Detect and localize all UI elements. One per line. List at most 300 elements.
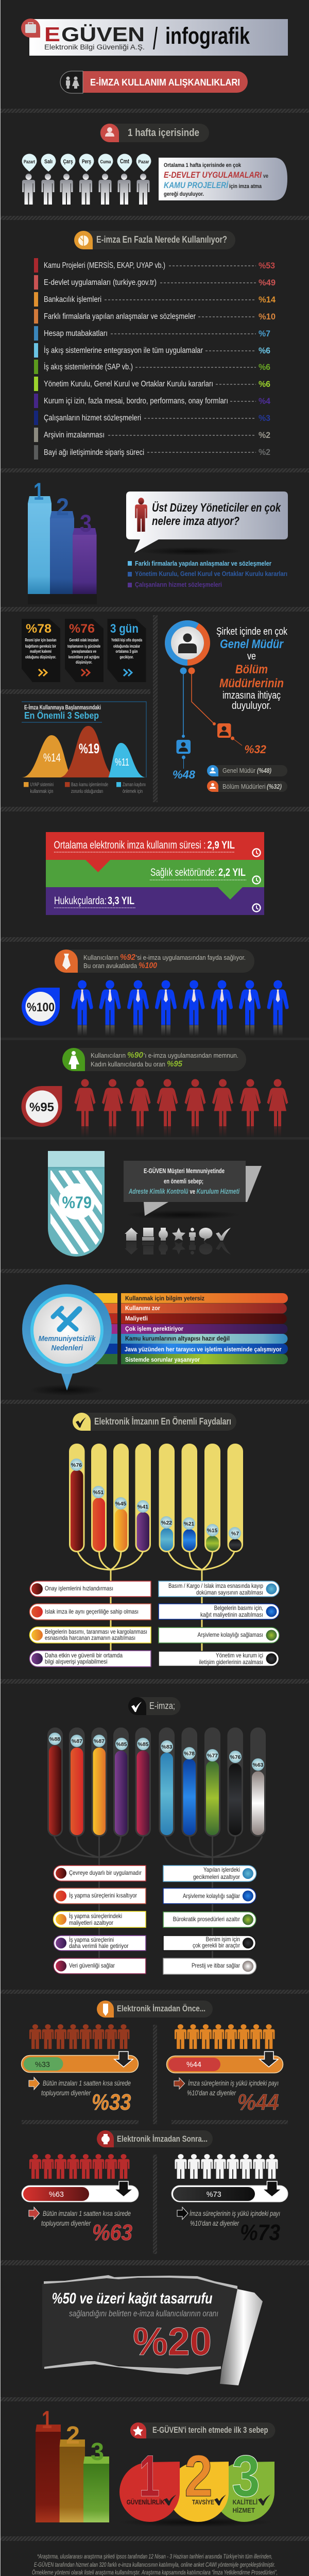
legend: top 3: Farklı firmalarla yapılan anlaşmalar ve sözleşmeler	[135, 560, 271, 567]
callout: müşteri memnuniyeti: Adreste Kimlik Kontrolü	[128, 1188, 188, 1195]
row: hesap mutabakatları	[34, 326, 270, 341]
bar 3	[73, 510, 97, 594]
bar 1: 1	[33, 478, 44, 505]
label: kayıp doküman: doküman sayısının azaltılması	[196, 1589, 263, 1596]
pill heading: elektronik imzadan sonra: Elektronik İmzadan Sonra...	[117, 2134, 208, 2144]
label: bürokrasi: Bürokratik prosedürleri azaltır	[173, 1916, 240, 1923]
pill heading: en önemli faydalar: Elektronik İmzanın En Önemli Faydaları	[94, 1416, 231, 1427]
label: süreç kısaltma: İş yapma süreçlerini kısaltıyor	[69, 1892, 137, 1899]
logo wordmark	[44, 24, 145, 51]
row: kurum içi	[34, 394, 271, 408]
benefit tube chart	[69, 1444, 243, 1651]
bar 2: 2	[56, 493, 69, 520]
badge: %100: %100	[27, 1001, 55, 1014]
bar 2	[50, 493, 74, 594]
top three badges	[118, 2444, 274, 2527]
blue connector	[173, 668, 196, 781]
label: güvenli ortam	[29, 1651, 151, 1667]
stat card: %78: olduğunu düşünüyor.	[25, 654, 56, 659]
progress bar: %44	[167, 2052, 283, 2073]
badge 1: güvenilirlik: 1	[139, 2444, 160, 2509]
progress bar: %44: %44	[186, 2060, 201, 2069]
3d bar chart: üst düzey yöneticiler	[28, 478, 97, 604]
badge: %95	[22, 1086, 62, 1127]
capsule: %79	[48, 1151, 105, 1257]
row: yönetim kurulu: %6	[259, 379, 270, 389]
label: kağıt maliyeti	[159, 1604, 279, 1619]
badge: %95: %95	[29, 1100, 54, 1114]
label: kağıt maliyeti: kağıt maliyetinin azaltılması	[200, 1611, 263, 1618]
duration panel	[46, 832, 264, 915]
chart: en önemli 3 sebep	[22, 702, 146, 794]
row: arşiv: %2	[259, 430, 270, 440]
caption: %44	[174, 2078, 279, 2115]
bar 1	[28, 478, 52, 594]
pill: %90 memnun: Kullanıcıların	[91, 1052, 126, 1059]
label: maliyet: İş yapma süreçlerindeki	[69, 1912, 122, 1920]
legend pill: genel müdür: (%48)	[257, 767, 271, 774]
tube %78: %78	[184, 1751, 195, 1757]
legend: sebepler	[24, 782, 146, 794]
badge 3: kaliteli hizmet: HİZMET	[233, 2506, 255, 2514]
legend pill: bölüm müdürleri	[207, 781, 287, 792]
men row	[72, 980, 289, 1036]
label: çevreye duyarlı	[54, 1866, 146, 1881]
caption: %33	[29, 2077, 131, 2115]
stat card: 3 gün	[107, 619, 146, 682]
callout: e-devlet and kamu projeleri: KAMU PROJELERİ	[164, 181, 229, 190]
badge 2: tavsiye: TAVSİYE	[192, 2498, 214, 2506]
pill: %92 fayda sağlıyor	[55, 950, 254, 973]
tube %41	[135, 1444, 151, 1552]
icon: crossed tools	[53, 1308, 79, 1329]
row: kurum içi: %4	[259, 396, 271, 406]
bar: java: Java yüzünden her tarayıcı ve işletim sisteminde çalışmıyor	[125, 1347, 282, 1353]
bar: kamu altyapısı: Kamu kurumlarının altyapısı hazır değil	[125, 1336, 230, 1342]
stat card: %78: Resmi işler için basılan	[25, 637, 57, 642]
row: kamu projeleri: %53	[259, 261, 275, 270]
legend pill: genel müdür	[207, 765, 287, 776]
callout: e-devlet and kamu projeleri: ve	[263, 173, 268, 179]
caption: %73: %10'dan az diyenler	[190, 2219, 239, 2227]
pill heading: elektronik imzadan önce	[97, 2001, 213, 2018]
row: sap: %6	[259, 362, 270, 372]
progress bar: %63	[22, 2181, 139, 2202]
people row: önce right	[175, 2024, 274, 2049]
row: iş akış entegrasyon: İş akış sistemlerine entegrasyon ile tüm uygulamalar	[44, 346, 203, 355]
callout: müşteri memnuniyeti: E-GÜVEN Müşteri Memnuniyetinde	[144, 1167, 225, 1175]
row: sap	[34, 360, 270, 374]
row: bayi ağı: %2	[259, 447, 270, 457]
row: yönetim kurulu: Yönetim Kurulu, Genel Kurul ve Ortaklar Kurulu kararları	[44, 380, 213, 388]
tube %77	[204, 1727, 220, 1837]
stat card: %76: %76	[69, 622, 95, 636]
legend pill: genel müdür: Genel Müdür	[222, 767, 255, 774]
label: çevreye duyarlı: Çevreye duyarlı bir uygulamadır	[69, 1869, 142, 1876]
stat card: %76	[65, 619, 104, 682]
label: gecikmeler: gecikmeleri azaltıyor	[193, 1873, 240, 1880]
row: bankacılık: Bankacılık işlemleri	[44, 295, 101, 304]
stat card: %78: maliyet kalemi	[30, 649, 52, 654]
icon row: services	[125, 1228, 231, 1255]
row: bankacılık	[34, 292, 276, 307]
label: onay işlemleri	[30, 1581, 151, 1597]
day pins: Salı	[44, 159, 53, 165]
pill heading: e-güven tercih sebepleri	[130, 2422, 275, 2438]
pill heading: 1 hafta içerisinde	[100, 124, 209, 142]
caption: %44: %10'dan az diyenler	[187, 2089, 236, 2097]
band: ortalama: Ortalama elektronik imza kullanım süresi :	[54, 839, 206, 851]
label: kayıp doküman	[159, 1581, 279, 1597]
label: ıslak imza	[29, 1604, 151, 1620]
progress bar: %33: %33	[35, 2060, 50, 2069]
pill: %92 fayda sağlıyor: Kullanıcıların	[83, 954, 118, 961]
legend: top 3	[128, 560, 287, 588]
callout: müşteri memnuniyeti: en önemli sebep;	[164, 1177, 203, 1185]
badge 2: tavsiye	[168, 2444, 229, 2522]
stat card: 3 gün: olduğunda imzalar	[113, 643, 140, 649]
callout: e-devlet and kamu projeleri: gereği duyuluyor.	[164, 191, 204, 197]
caption: %44: İmza süreçlerinin iş yükü içindeki payı	[188, 2079, 279, 2087]
caption: %33: Bütün imzaları 1 saatten kısa sürede	[43, 2079, 131, 2087]
bar: kamu altyapısı	[67, 1334, 287, 1344]
badge 3: kaliteli hizmet: 3	[232, 2444, 260, 2509]
badge: %100	[22, 988, 60, 1026]
bar: çok işlem: Çok işlem gerektiriyor	[125, 1326, 183, 1332]
map pin: memnuniyetsizlik nedenleri: Nedenleri	[52, 1344, 83, 1352]
tube %87: %87	[72, 1738, 82, 1744]
label: gerekli araç: çok gerekli bir araçtır	[193, 1942, 240, 1949]
pill heading: e-imza: E-imza;	[149, 1701, 175, 1711]
tube %41: %41	[138, 1504, 148, 1510]
label: arşivleme: Arşivleme kolaylığı sağlaması	[198, 1631, 263, 1638]
label: verimli: daha verimli hale getiriyor	[69, 1942, 129, 1950]
row: iş akış entegrasyon	[34, 343, 270, 358]
icon: woman	[68, 1051, 79, 1069]
tube %21	[181, 1444, 197, 1552]
people row: önce left	[29, 2024, 129, 2049]
row: kamu projeleri: Kamu Projeleri (MERSİS, EKAP, UYAP vb.)	[44, 261, 165, 270]
memnuniyetsizlik nedenleri bars	[67, 1293, 288, 1364]
legend: sebepler: UYAP sistemini	[30, 782, 54, 788]
podium 2	[60, 2422, 85, 2522]
label: gerekli araç	[163, 1936, 255, 1951]
stat card: %76: toplamanın iş gücünde	[67, 643, 100, 649]
usage list	[34, 258, 276, 460]
torn paper panel: kağıt tasarrufu: %50 ve üzeri kağıt tasarrufu	[52, 2290, 213, 2307]
day pins: Pazar	[138, 159, 149, 165]
row: hizmet sözleşmeleri: %3	[259, 413, 270, 423]
caption: %33: topluyorum diyenler	[41, 2089, 91, 2097]
label: bürokrasi	[163, 1912, 256, 1927]
row: sözleşmeler: %10	[259, 312, 276, 321]
e-imza labels right	[163, 1866, 256, 1974]
pill heading: 1 hafta içerisinde: 1 hafta içerisinde	[128, 127, 199, 139]
bar: maliyetli: Maliyetli	[125, 1316, 148, 1322]
tube %15	[204, 1444, 220, 1552]
label: belgelerin basımı	[29, 1627, 151, 1643]
badge 1: güvenilirlik	[119, 2444, 180, 2522]
logo wordmark: GÜVEN	[61, 24, 145, 46]
row: kurum içi: Kurum içi izin, fazla mesai, bordro, performans, onay formları	[44, 397, 228, 405]
callout: müşteri memnuniyeti: ve	[190, 1188, 195, 1195]
caption: %73	[177, 2207, 280, 2245]
callout: e-devlet and kamu projeleri: Ortalama 1 hafta içerisinde en çok	[164, 162, 242, 168]
tube %77: %77	[207, 1753, 218, 1759]
peak %14	[22, 735, 71, 777]
tube %45: %45	[115, 1501, 126, 1507]
bar: kullanımı zor: Kullanımı zor	[125, 1306, 160, 1312]
band: sağlık	[46, 860, 264, 887]
label: veri güvenliği: Veri güvenliği sağlar	[69, 1962, 115, 1969]
label: arşivleme	[159, 1628, 279, 1643]
tube %88: %88	[49, 1736, 60, 1742]
tube %76: %76	[71, 1462, 82, 1468]
connectors	[54, 1836, 262, 1959]
legend: sebepler: kullanmak için	[30, 789, 54, 794]
peak %11	[108, 743, 146, 777]
day pins: Cmt	[120, 158, 129, 165]
tube %51: %51	[93, 1489, 104, 1496]
speech bubble: üst düzey yöneticiler	[126, 492, 288, 555]
blue connector: %48	[173, 768, 196, 781]
caption: %33: %33	[92, 2090, 131, 2115]
ring chart text: ve	[247, 651, 256, 662]
tube %76	[228, 1727, 243, 1837]
ring chart text: Bölüm	[235, 663, 268, 676]
day pins: Pazart	[24, 159, 35, 164]
people row: sonra left	[29, 2154, 129, 2179]
e-imza labels left	[54, 1866, 146, 1974]
tube %45	[113, 1444, 129, 1552]
label: gerekli araç: Benim işim için	[206, 1936, 240, 1943]
stat card: %76: yavaşlamalara ve	[72, 649, 96, 654]
callout: müşteri memnuniyeti	[124, 1161, 262, 1219]
footnote	[21, 2553, 288, 2576]
row: hesap mutabakatları: Hesap mutabakatları	[44, 329, 108, 338]
row: bayi ağı	[34, 445, 270, 460]
pill heading: en önemli faydalar	[73, 1413, 236, 1431]
chart: en önemli 3 sebep: E-İmza Kullanmaya Başlanmasındaki	[24, 704, 101, 711]
tube %85 second	[135, 1727, 151, 1837]
legend: top 3: Çalışanların hizmet sözleşmeleri	[135, 581, 222, 588]
torn edge top	[44, 2275, 237, 2289]
pill: %90 memnun: Kadın kullanıcılarda bu oran	[91, 1061, 165, 1068]
people row: sonra right	[175, 2154, 278, 2179]
3d podium chart	[36, 2406, 109, 2522]
pill: %90 memnun	[62, 1048, 246, 1071]
tube %21: %21	[184, 1521, 194, 1527]
bar: sistem sorunları	[67, 1354, 288, 1364]
stat card: %78: kağıtların gereksiz bir	[25, 643, 56, 649]
tube %22	[159, 1444, 175, 1552]
tube %63: %63	[252, 1762, 264, 1768]
torn paper panel: kağıt tasarrufu	[42, 2275, 263, 2385]
day pins: Cuma	[100, 159, 111, 165]
speech bubble: üst düzey yöneticiler: nelere imza atıyor?	[152, 514, 239, 528]
pill: %92 fayda sağlıyor: Bu oran avukatlarda	[83, 962, 137, 970]
banner title: infografik	[165, 23, 250, 49]
row: e-devlet	[34, 275, 276, 290]
chart: en önemli 3 sebep: En Önemli 3 Sebep	[24, 710, 99, 721]
caption: %73: İmza süreçlerinin iş yükü içindeki payı	[190, 2209, 280, 2217]
ring chart text: Genel Müdür	[220, 637, 284, 651]
pill heading: elektronik imzadan sonra	[97, 2130, 213, 2147]
podium 3	[83, 2438, 109, 2522]
pill heading: e-güven tercih sebepleri: E-GÜVEN'i tercih etmede ilk 3 sebep	[152, 2425, 268, 2435]
band: ortalama: 2,9 YIL	[207, 839, 235, 851]
pill heading: elektronik imzadan önce: Elektronik İmzadan Önce...	[117, 2004, 205, 2013]
row: sözleşmeler: Farklı firmalarla yapılan anlaşmalar ve sözleşmeler	[44, 312, 196, 321]
label: belgelerin basımı: Belgelerin basımı, taranması ve kargolanması	[45, 1628, 147, 1635]
row: sözleşmeler	[34, 309, 276, 324]
label: prestij	[163, 1958, 256, 1974]
row: iş akış entegrasyon: %6	[259, 346, 270, 355]
label: verimli: İş yapma süreçlerini	[69, 1936, 114, 1943]
tube %7	[228, 1444, 243, 1552]
podium 1: 1	[42, 2406, 52, 2434]
label: iletişim giderleri: Yönetim ve kurum içi	[216, 1652, 263, 1659]
stat card: %78: %78	[26, 622, 52, 636]
stat card: %76: düşünüyor.	[76, 659, 92, 665]
label: onay işlemleri: Onay işlemlerini hızlandırması	[45, 1585, 113, 1592]
legend pill: bölüm müdürleri: (%32)	[267, 783, 282, 790]
caption: %63: Bütün imzaları 1 saatten kısa sürede	[43, 2209, 131, 2217]
bar 3: 3	[80, 510, 92, 537]
row: sap: İş akış sistemlerinde (SAP vb.)	[44, 362, 133, 371]
callout: e-devlet and kamu projeleri: için imza atma	[229, 183, 262, 190]
speech bubble: üst düzey yöneticiler: Üst Düzey Yöneticiler en çok	[152, 501, 281, 514]
label: belgelerin basımı: esnasında harcanan zamanın azaltılması	[45, 1634, 135, 1641]
stat card: 3 gün: Yetkili kişi ofis dışında	[111, 637, 142, 642]
callout: müşteri memnuniyeti: Kurulum Hizmeti	[197, 1188, 239, 1195]
podium 2: 2	[66, 2422, 80, 2449]
bar: java	[67, 1344, 288, 1354]
label: verimli	[54, 1936, 146, 1951]
tube %87	[69, 1727, 84, 1837]
label: iletişim giderleri: iletişim giderlerinin azalması	[199, 1658, 263, 1666]
day pins: Perş	[82, 159, 91, 165]
band: sağlık: Sağlık sektöründe:	[150, 867, 217, 878]
ring chart text	[216, 626, 288, 711]
tube %83: %83	[162, 1744, 173, 1750]
icon: house	[125, 1228, 138, 1241]
caption: %63: %63	[92, 2220, 132, 2245]
ring chart text: Şirket içinde en çok	[216, 626, 288, 637]
row: hizmet sözleşmeleri: Çalışanların hizmet sözleşmeleri	[44, 414, 141, 422]
pill: %90 memnun: 'ı e-imza uygulamasından memnun.	[144, 1052, 238, 1059]
orange connector	[188, 668, 267, 756]
label: gecikmeler	[163, 1866, 256, 1882]
stat card: 3 gün: ortalama 3 gün	[115, 649, 138, 654]
bar: kullanmak için bilgim yetersiz: Kullanmak için bilgim yetersiz	[125, 1296, 204, 1302]
peak %19	[60, 726, 118, 777]
ring chart text: imzasına ihtiyaç	[222, 690, 281, 701]
icon: tie	[62, 954, 71, 970]
row: e-devlet: E-devlet uygulamaları (turkiye.gov.tr)	[44, 278, 157, 287]
pill: %92 fayda sağlıyor: %92	[120, 953, 135, 962]
pill heading: e-imza	[128, 1697, 180, 1715]
label: prestij: Prestij ve itibar sağlar	[192, 1962, 240, 1969]
label: süreç kısaltma	[54, 1888, 146, 1904]
label: ıslak imza: Islak imza ile aynı geçerliliğe sahip olması	[45, 1608, 139, 1615]
label: güvenli ortam: bilgi alışverişi yapılabilmesi	[45, 1658, 107, 1665]
band: sağlık: 2,2 YIL	[218, 867, 246, 878]
badge 1: güvenilirlik: GÜVENİLİRLİK	[127, 2498, 165, 2506]
band: hukukçular: Hukukçularda:	[54, 895, 107, 907]
label: arşivleme: Arşivleme kolaylığı sağlar	[183, 1892, 240, 1900]
capsule: %79: %79	[62, 1193, 92, 1212]
logo wordmark: E	[44, 24, 60, 46]
legend: sebepler: önlemek için	[123, 789, 143, 794]
label: iletişim giderleri	[159, 1651, 279, 1666]
podium 1	[36, 2406, 61, 2522]
progress bar: %33	[22, 2052, 138, 2072]
tube %83	[159, 1727, 175, 1837]
weekly person figures	[22, 174, 149, 205]
callout: e-devlet and kamu projeleri	[159, 158, 287, 200]
section heading: e-imza kullanım alışkanlıkları: E-İMZA KULLANIM ALIŞKANLIKLARI	[90, 77, 240, 88]
stat card: %76: kesintilere yol açtığını	[68, 654, 99, 659]
icon: red manager	[135, 498, 147, 532]
map pin: memnuniyetsizlik nedenleri: Memnuniyetsizlik	[39, 1334, 96, 1343]
label: arşivleme	[163, 1888, 256, 1904]
icon: watch	[159, 1228, 168, 1241]
row: yönetim kurulu	[34, 377, 270, 391]
badge 3: kaliteli hizmet	[214, 2444, 274, 2522]
legend: sebepler: Zaman kaybını	[123, 782, 146, 788]
row: kamu projeleri	[34, 258, 275, 273]
e-imza tube chart	[47, 1727, 266, 1959]
caption: %63: topluyorum diyenler	[41, 2219, 91, 2227]
peak %11: %11	[115, 757, 129, 768]
women row	[74, 1079, 288, 1137]
benefit labels left	[29, 1581, 151, 1667]
progress bar: %73	[171, 2181, 288, 2202]
ring chart text: duyuluyor.	[232, 700, 271, 711]
peak %19: %19	[79, 741, 99, 756]
peak %14: %14	[43, 751, 61, 764]
row: hesap mutabakatları: %7	[259, 329, 270, 338]
torn paper panel: kağıt tasarrufu: %20	[133, 2320, 212, 2364]
bar: çok işlem	[67, 1324, 287, 1334]
stat card: %76: Gerekli ıslak imzaları	[69, 637, 99, 642]
ring chart: genel müdür ve bölüm müdürleri	[168, 623, 267, 781]
progress bar: %73: %73	[207, 2190, 221, 2199]
label: maliyet	[54, 1911, 146, 1927]
tube %88	[47, 1727, 63, 1837]
tube %7: %7	[231, 1531, 239, 1537]
band: ortalama	[46, 832, 264, 860]
stat card: 3 gün: gecikiyor.	[119, 654, 134, 659]
row: arşiv: Arşivin imzalanması	[44, 431, 105, 439]
label: veri güvenliği	[54, 1958, 146, 1974]
caption: %63	[29, 2207, 132, 2245]
row: bankacılık: %14	[259, 295, 276, 304]
day pins	[22, 154, 151, 172]
logo wordmark: Elektronik Bilgi Güvenliği A.Ş.	[44, 43, 145, 51]
row: e-devlet: %49	[259, 278, 276, 287]
label: güvenli ortam: Daha etkin ve güvenli bir ortamda	[45, 1652, 123, 1659]
bar: kullanmak için bilgim yetersiz	[67, 1293, 288, 1303]
torn edge bottom	[44, 2361, 221, 2375]
legend: sebepler: Bazı kamu işlemlerinde	[71, 782, 108, 788]
icon: computer	[142, 1228, 154, 1241]
tube %78	[181, 1727, 197, 1837]
tube %22: %22	[161, 1520, 172, 1526]
pill: %90 memnun: %95	[167, 1060, 183, 1069]
section heading: e-imza kullanım alışkanlıkları	[60, 71, 248, 93]
